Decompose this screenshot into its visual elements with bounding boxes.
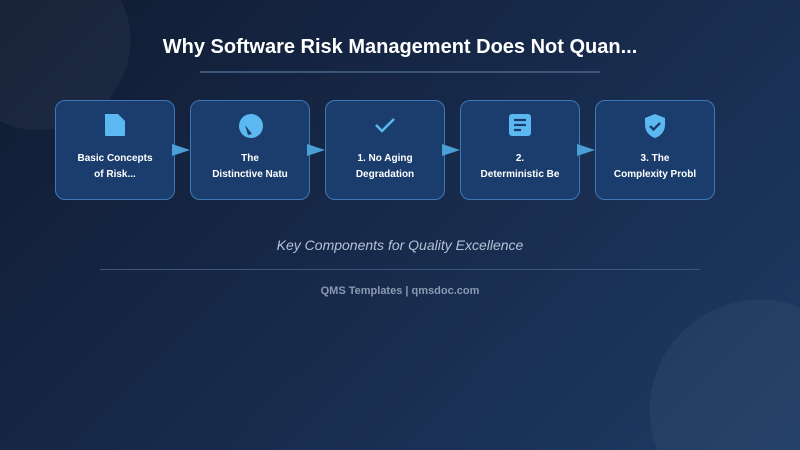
icon: shield — [645, 114, 665, 138]
arrow 2 — [307, 144, 325, 156]
step 4 — [460, 100, 580, 200]
step 2 — [190, 100, 310, 200]
step 4: 2. — [516, 153, 524, 164]
step 3 — [325, 100, 445, 200]
step 2: The — [241, 153, 259, 164]
icon: check — [375, 118, 395, 133]
step 2: Distinctive Natu — [212, 169, 288, 180]
title: Why Software Risk Management Does Not Quan... — [163, 36, 637, 58]
arrow 1 — [172, 144, 190, 156]
icon: document — [105, 114, 125, 136]
step 5: Complexity Probl — [614, 169, 696, 180]
step 1: of Risk... — [94, 169, 136, 180]
step 4: Deterministic Be — [481, 169, 559, 180]
footer: QMS Templates | qmsdoc.com — [321, 285, 479, 297]
step 5: 3. The — [641, 153, 669, 164]
icon: globe — [239, 114, 263, 138]
subtitle: Key Components for Quality Excellence — [277, 237, 523, 253]
icon: text doc — [509, 114, 531, 136]
step 3: 1. No Aging — [357, 153, 413, 164]
step 1: Basic Concepts — [77, 153, 153, 164]
step 1 — [55, 100, 175, 200]
arrow 3 — [442, 144, 460, 156]
step 5 — [595, 100, 715, 200]
arrow 4 — [577, 144, 595, 156]
step 3: Degradation — [356, 169, 414, 180]
